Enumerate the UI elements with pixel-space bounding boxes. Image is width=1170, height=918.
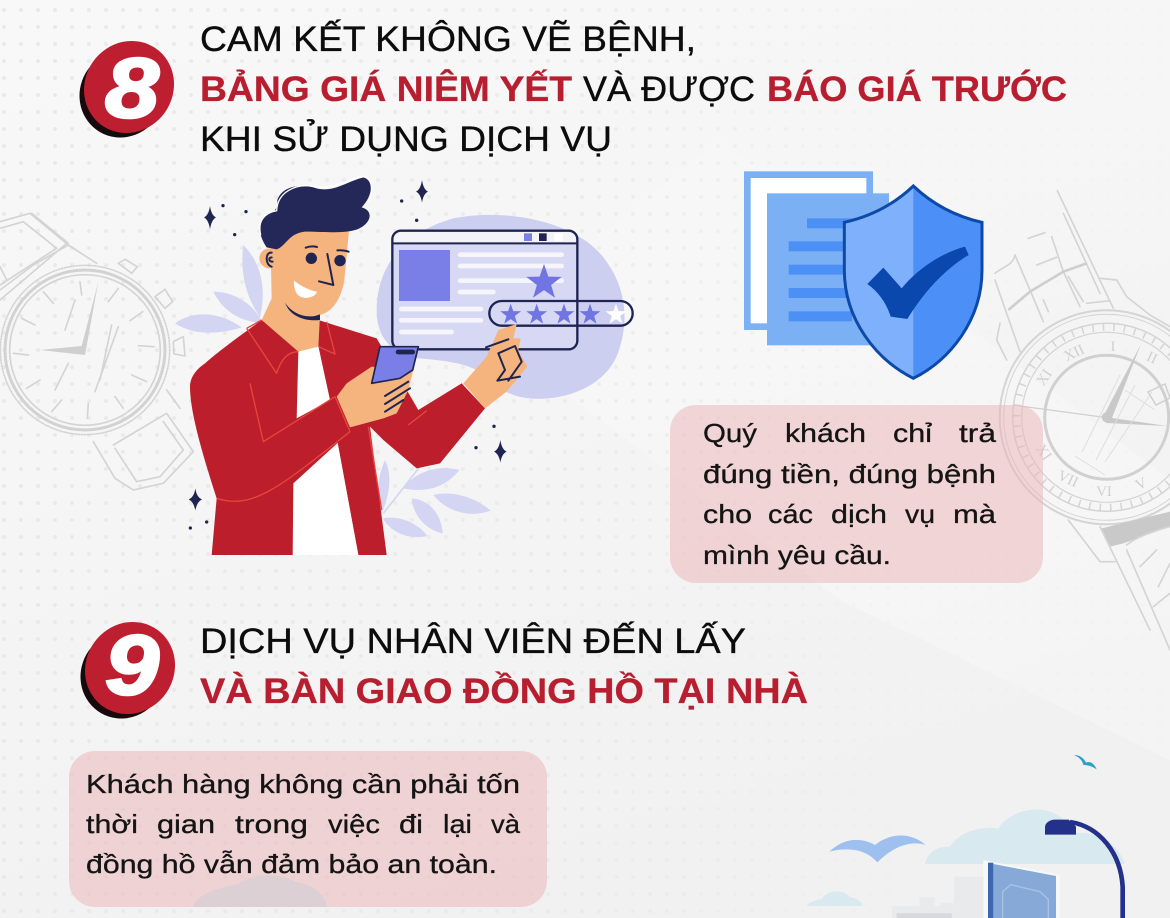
info box 8: dịch <box>831 499 887 529</box>
info box 9: đi <box>399 809 423 839</box>
heading 8: VÀ ĐƯỢC <box>583 70 755 109</box>
heading 9: VÀ BÀN GIAO ĐỒNG HỒ TẠI NHÀ <box>200 671 808 711</box>
man figure <box>190 177 527 555</box>
info box 9: đồng hồ vẫn đảm bảo an toàn. <box>86 849 497 879</box>
info box 9: lại <box>443 809 472 839</box>
star rating bar <box>489 301 633 326</box>
watch sketch: right: XI <box>1032 442 1054 464</box>
info box 9: trong <box>235 809 308 839</box>
info box 9: và <box>491 809 521 839</box>
info box 8: cho <box>703 499 752 529</box>
documents <box>744 171 889 345</box>
bird: blue <box>829 836 926 862</box>
watch sketch: left <box>0 213 193 490</box>
watch sketch: right: II <box>1144 349 1160 368</box>
watch sketch: right <box>995 191 1170 650</box>
heading 8: BÁO GIÁ TRƯỚC <box>767 69 1067 109</box>
watch sketch: right: I <box>1110 339 1116 355</box>
info box 8: chỉ <box>893 418 932 448</box>
watch sketch: right: XI <box>1034 367 1056 389</box>
info box 8 <box>670 405 1043 583</box>
watch sketch: right: VI <box>1096 484 1112 500</box>
info box 8: Quý <box>703 418 757 448</box>
number badge 8 <box>64 23 192 153</box>
watch sketch: right: VII <box>1055 468 1081 491</box>
buildings <box>892 877 987 918</box>
sparkles <box>189 180 507 530</box>
leaves <box>175 245 491 537</box>
info box 9: việc <box>328 809 380 839</box>
info box 8: trả <box>959 418 997 448</box>
info box 8: các <box>768 499 813 529</box>
info box 9 <box>69 751 547 907</box>
info box 8: mình yêu cầu. <box>703 540 891 570</box>
watch sketch: right: XII <box>1061 342 1087 365</box>
heading 8: BẢNG GIÁ NIÊM YẾT <box>200 69 572 109</box>
info box 8: đúng tiền, đúng bệnh <box>703 459 996 489</box>
illustration: city street corner <box>806 755 1125 918</box>
clouds <box>806 810 1125 906</box>
heading 9: DỊCH VỤ NHÂN VIÊN ĐẾN LẤY <box>200 621 746 661</box>
icon: documents with shield <box>744 171 982 378</box>
illustration: man rating on a screen <box>175 177 633 555</box>
browser window <box>392 231 577 349</box>
info box 8: vụ <box>905 499 935 529</box>
shield <box>844 186 982 378</box>
purple blob <box>377 215 624 399</box>
bird: teal <box>1074 755 1097 769</box>
info box 9: gian <box>157 809 215 839</box>
heading 8: KHI SỬ DỤNG DỊCH VỤ <box>200 119 612 159</box>
info box 9: Khách hàng không cần phải tốn <box>86 769 520 799</box>
number badge 9: 9 <box>105 618 159 712</box>
watch sketch: right: V <box>1133 475 1150 494</box>
number badge 9 <box>65 604 193 734</box>
info box 8: mà <box>953 499 997 529</box>
heading 8 <box>200 19 1067 159</box>
info box 8: khách <box>785 418 866 448</box>
heading 8: CAM KẾT KHÔNG VẼ BỆNH, <box>200 19 696 59</box>
billboard <box>983 860 1060 918</box>
street lamp <box>1045 820 1123 918</box>
heading 9 <box>200 621 808 711</box>
number badge 8: 8 <box>105 41 159 135</box>
info box 9: thời <box>86 809 138 839</box>
